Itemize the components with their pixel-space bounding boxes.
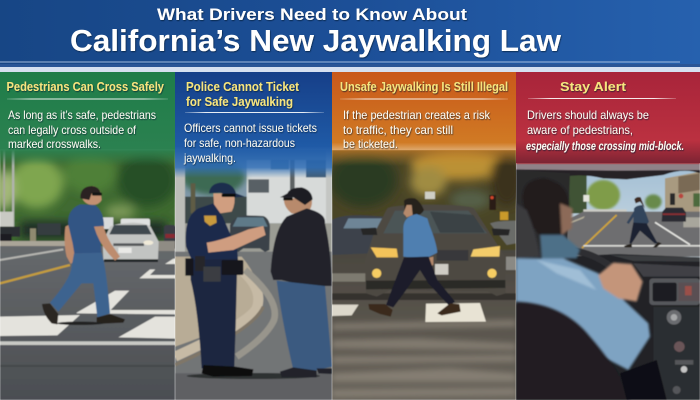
distant pedestrian <box>624 197 662 248</box>
police officer <box>185 183 266 377</box>
panel: stay alert <box>516 72 700 400</box>
panel heading: Pedestrians Can Cross Safely <box>6 80 164 94</box>
photo: driver watching a pedestrian through the windshield <box>516 150 700 400</box>
panel heading: Unsafe Jaywalking Is Still Illegal <box>340 80 508 94</box>
photo: officer talking with a man <box>175 150 332 400</box>
panel body text: aware of pedestrians, <box>527 123 633 137</box>
green header background <box>0 72 175 166</box>
crosswalk stripes <box>0 259 175 339</box>
dark suv <box>662 208 686 222</box>
panel: police cannot ticket <box>175 72 332 400</box>
red header background <box>516 72 700 163</box>
orange header background <box>332 72 516 166</box>
panel: unsafe jaywalking is still illegal <box>330 72 523 400</box>
panel heading <box>186 80 300 109</box>
panel body text: Officers cannot issue tickets <box>184 121 317 135</box>
panel body text: Drivers should always be <box>527 108 649 122</box>
dashboard <box>516 254 700 400</box>
photo: man crossing a street <box>0 150 177 400</box>
road and kerb <box>175 251 332 374</box>
title line one: What Drivers Need to Know About <box>157 5 467 24</box>
man in black jacket <box>271 187 332 377</box>
road <box>0 246 175 400</box>
panel: pedestrians can cross safely <box>0 72 177 400</box>
panel body text: As long as it’s safe, pedestrians <box>8 108 156 122</box>
headlit sedan <box>365 205 506 297</box>
other cars <box>332 215 383 255</box>
foreground seat <box>516 302 630 400</box>
title line two: California’s New Jaywalking Law <box>70 23 562 58</box>
road <box>332 250 516 400</box>
panel body text: can legally cross outside of <box>8 123 137 137</box>
panel body text: If the pedestrian creates a risk <box>343 108 491 122</box>
panel heading: Police Cannot Ticket <box>186 80 300 94</box>
driver <box>516 178 650 370</box>
road ahead <box>567 212 700 257</box>
photo: woman crossing in front of a car <box>330 150 523 400</box>
crosswalk paint <box>425 303 486 322</box>
title banner <box>0 0 700 72</box>
panel body text: to traffic, they can still <box>343 123 453 137</box>
panel body text <box>8 108 156 151</box>
panel heading: for Safe Jaywalking <box>186 95 293 109</box>
roof and pillars <box>516 168 700 180</box>
windshield view <box>571 170 700 258</box>
woman pedestrian <box>368 198 461 317</box>
blue header background <box>175 72 332 178</box>
silver car <box>103 223 159 260</box>
panel body text: for safe, non-hazardous <box>184 136 295 150</box>
man <box>42 186 125 324</box>
panel body text <box>526 108 684 153</box>
panel heading: Stay Alert <box>560 80 627 94</box>
panel body text <box>343 108 491 151</box>
dark car behind <box>230 215 270 252</box>
panel body text: be ticketed. <box>343 137 398 151</box>
panel body text: marked crosswalks. <box>8 137 101 151</box>
panel body text: jaywalking. <box>183 151 236 165</box>
steering wheel <box>577 248 611 267</box>
panel body text <box>183 121 317 165</box>
